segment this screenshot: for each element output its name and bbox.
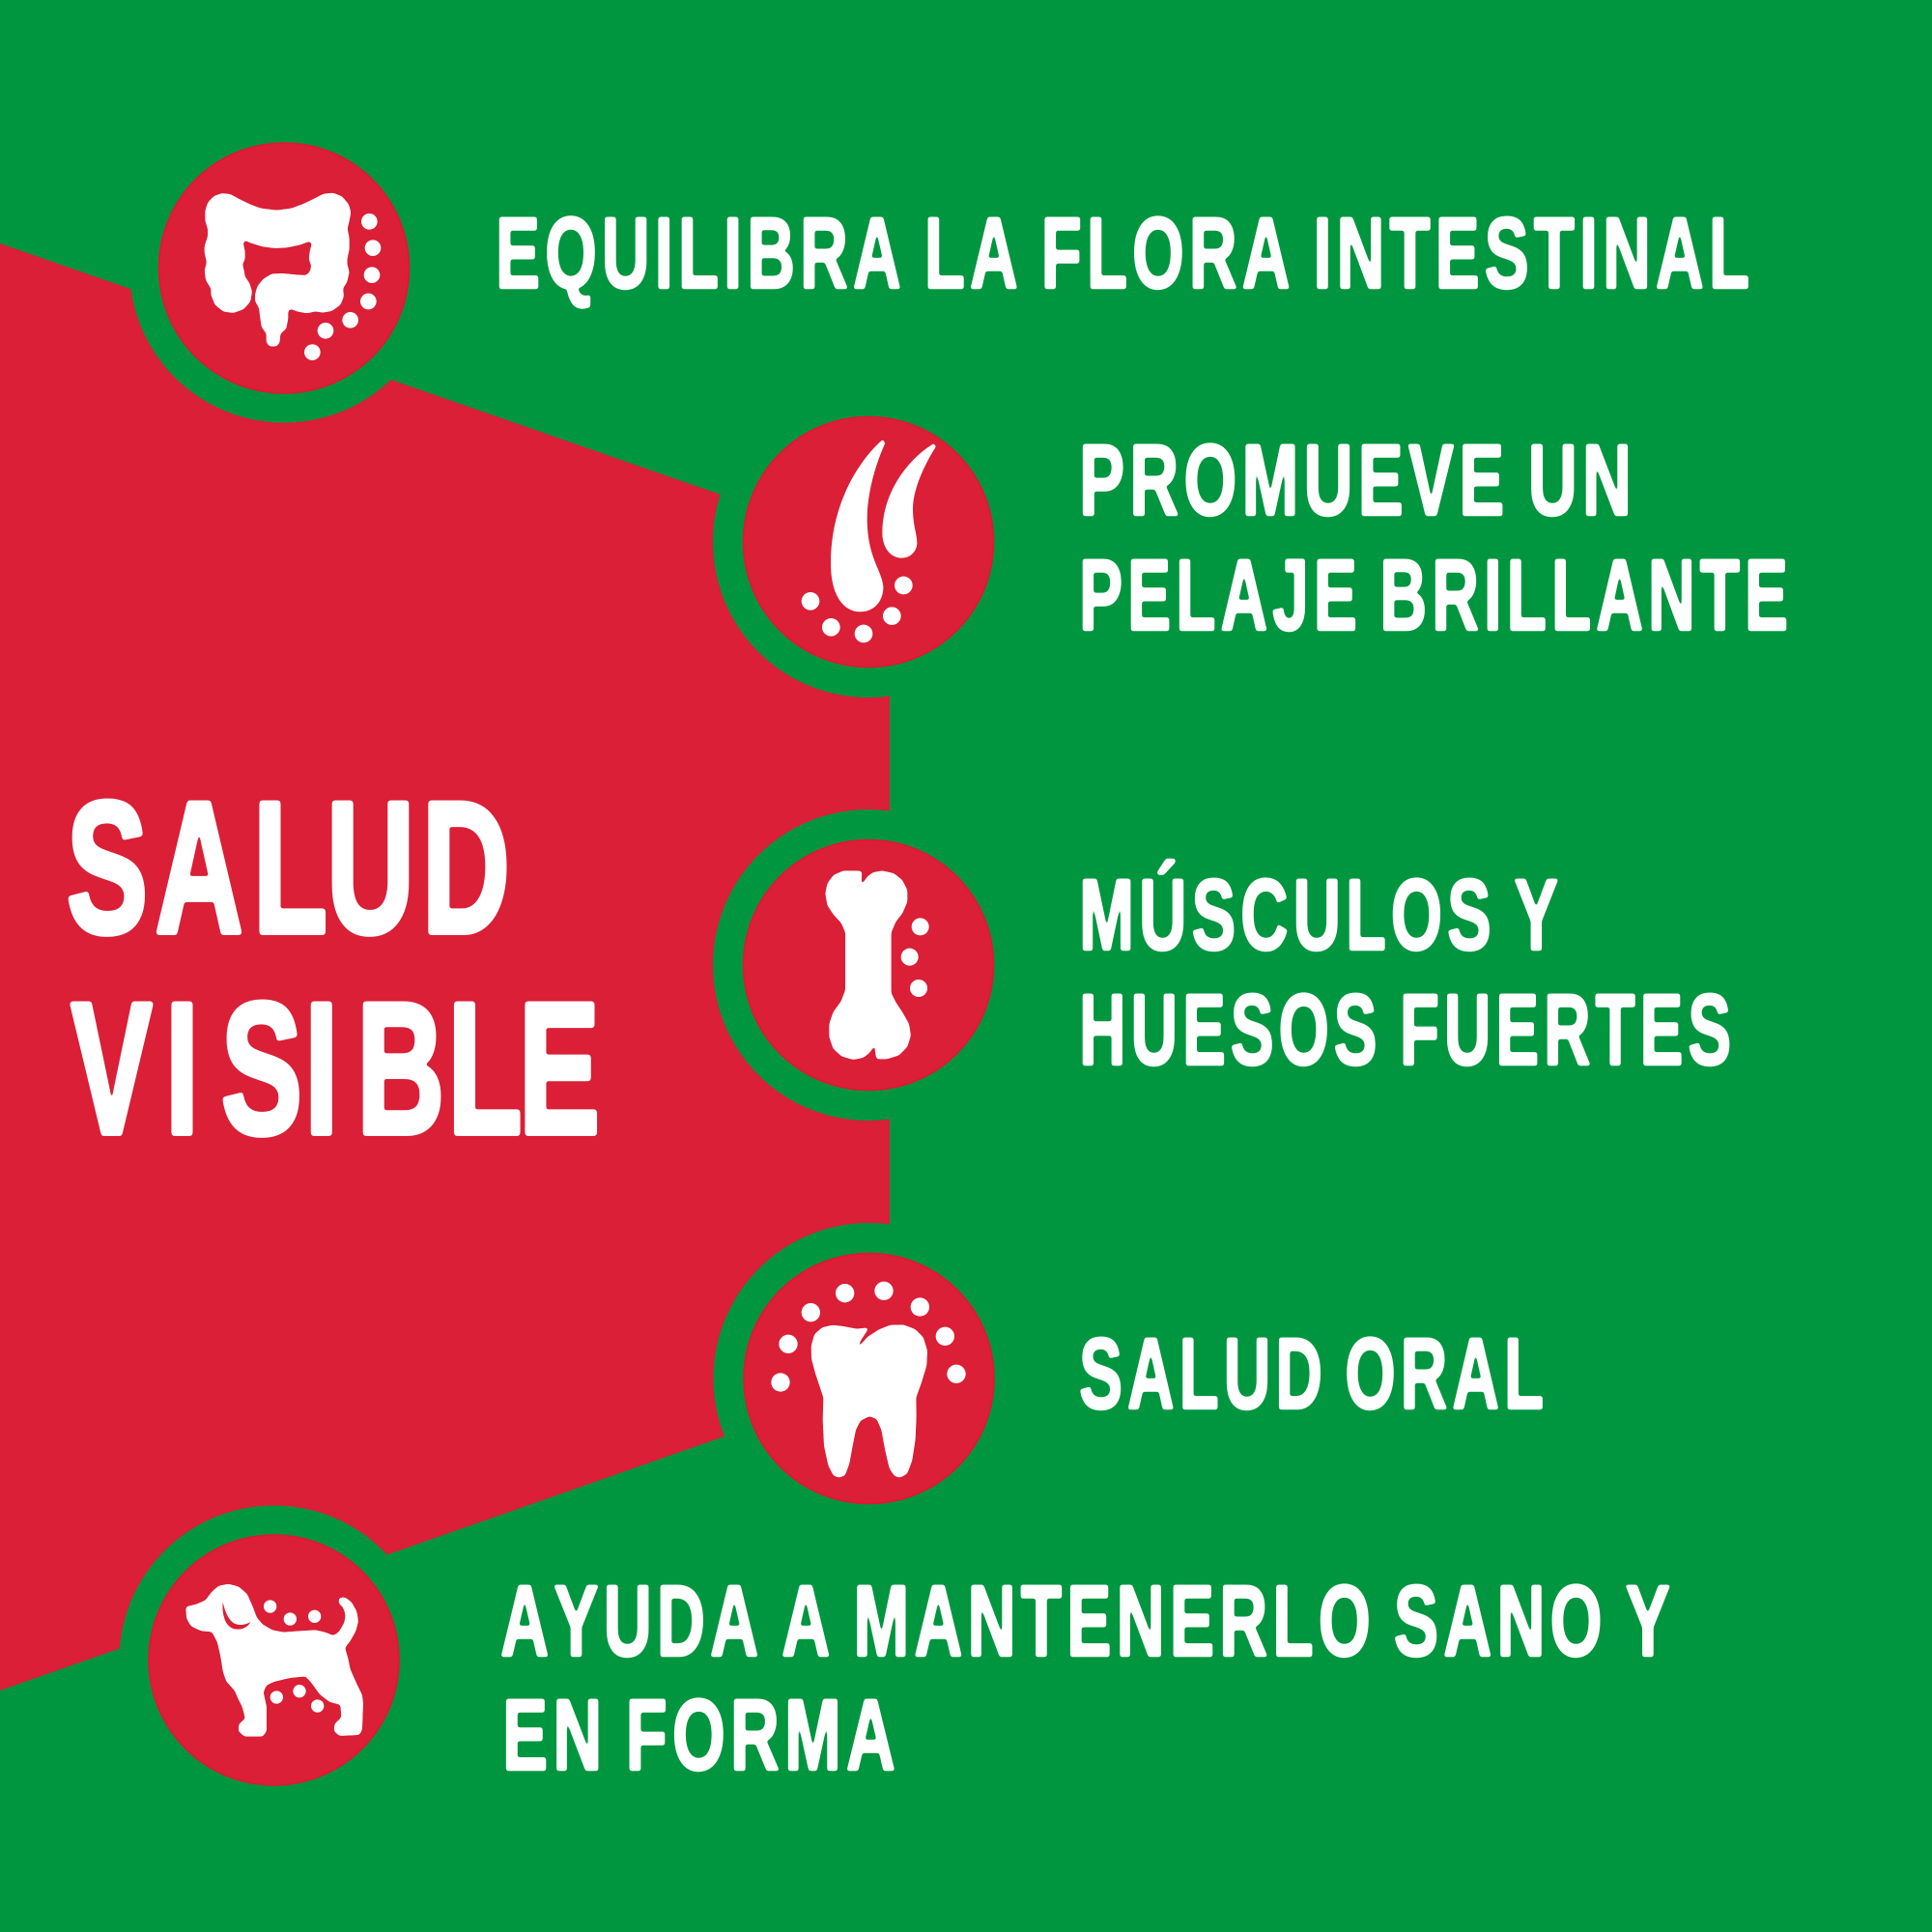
label: Ayuda a mantenerlo sano y en forma — [500, 1565, 1675, 1792]
label: Ayuda a mantenerlo sano y en forma: EN FORMA — [502, 1679, 900, 1792]
icon: intestine — [206, 194, 381, 360]
benefit 2: pelaje brillante — [713, 386, 1793, 697]
label: Salud oral: SALUD ORAL — [1079, 1318, 1548, 1431]
label: Musculos y huesos fuertes — [1079, 859, 1736, 1087]
benefit 4: salud oral — [713, 1223, 1548, 1534]
icon: tooth — [771, 1282, 966, 1477]
icon: bone — [826, 871, 929, 1059]
benefit 5: sano y en forma — [120, 1505, 1675, 1814]
label: Promueve un pelaje brillante: PROMUEVE UN — [1079, 424, 1636, 537]
heading: Salud Visible: VISIBLE — [71, 964, 600, 1174]
heading: Salud Visible — [67, 763, 600, 1174]
benefit 3: musculos y huesos — [713, 810, 1736, 1121]
heading: Salud Visible: SALUD — [67, 763, 510, 973]
label: Promueve un pelaje brillante — [1079, 424, 1793, 652]
icon: dog — [186, 1585, 362, 1736]
red hexagonal panel — [0, 243, 890, 1690]
benefit 1: flora intestinal — [129, 114, 1754, 423]
label: Musculos y huesos fuertes: MÚSCULOS Y — [1079, 859, 1563, 972]
icon: hair — [802, 440, 936, 642]
